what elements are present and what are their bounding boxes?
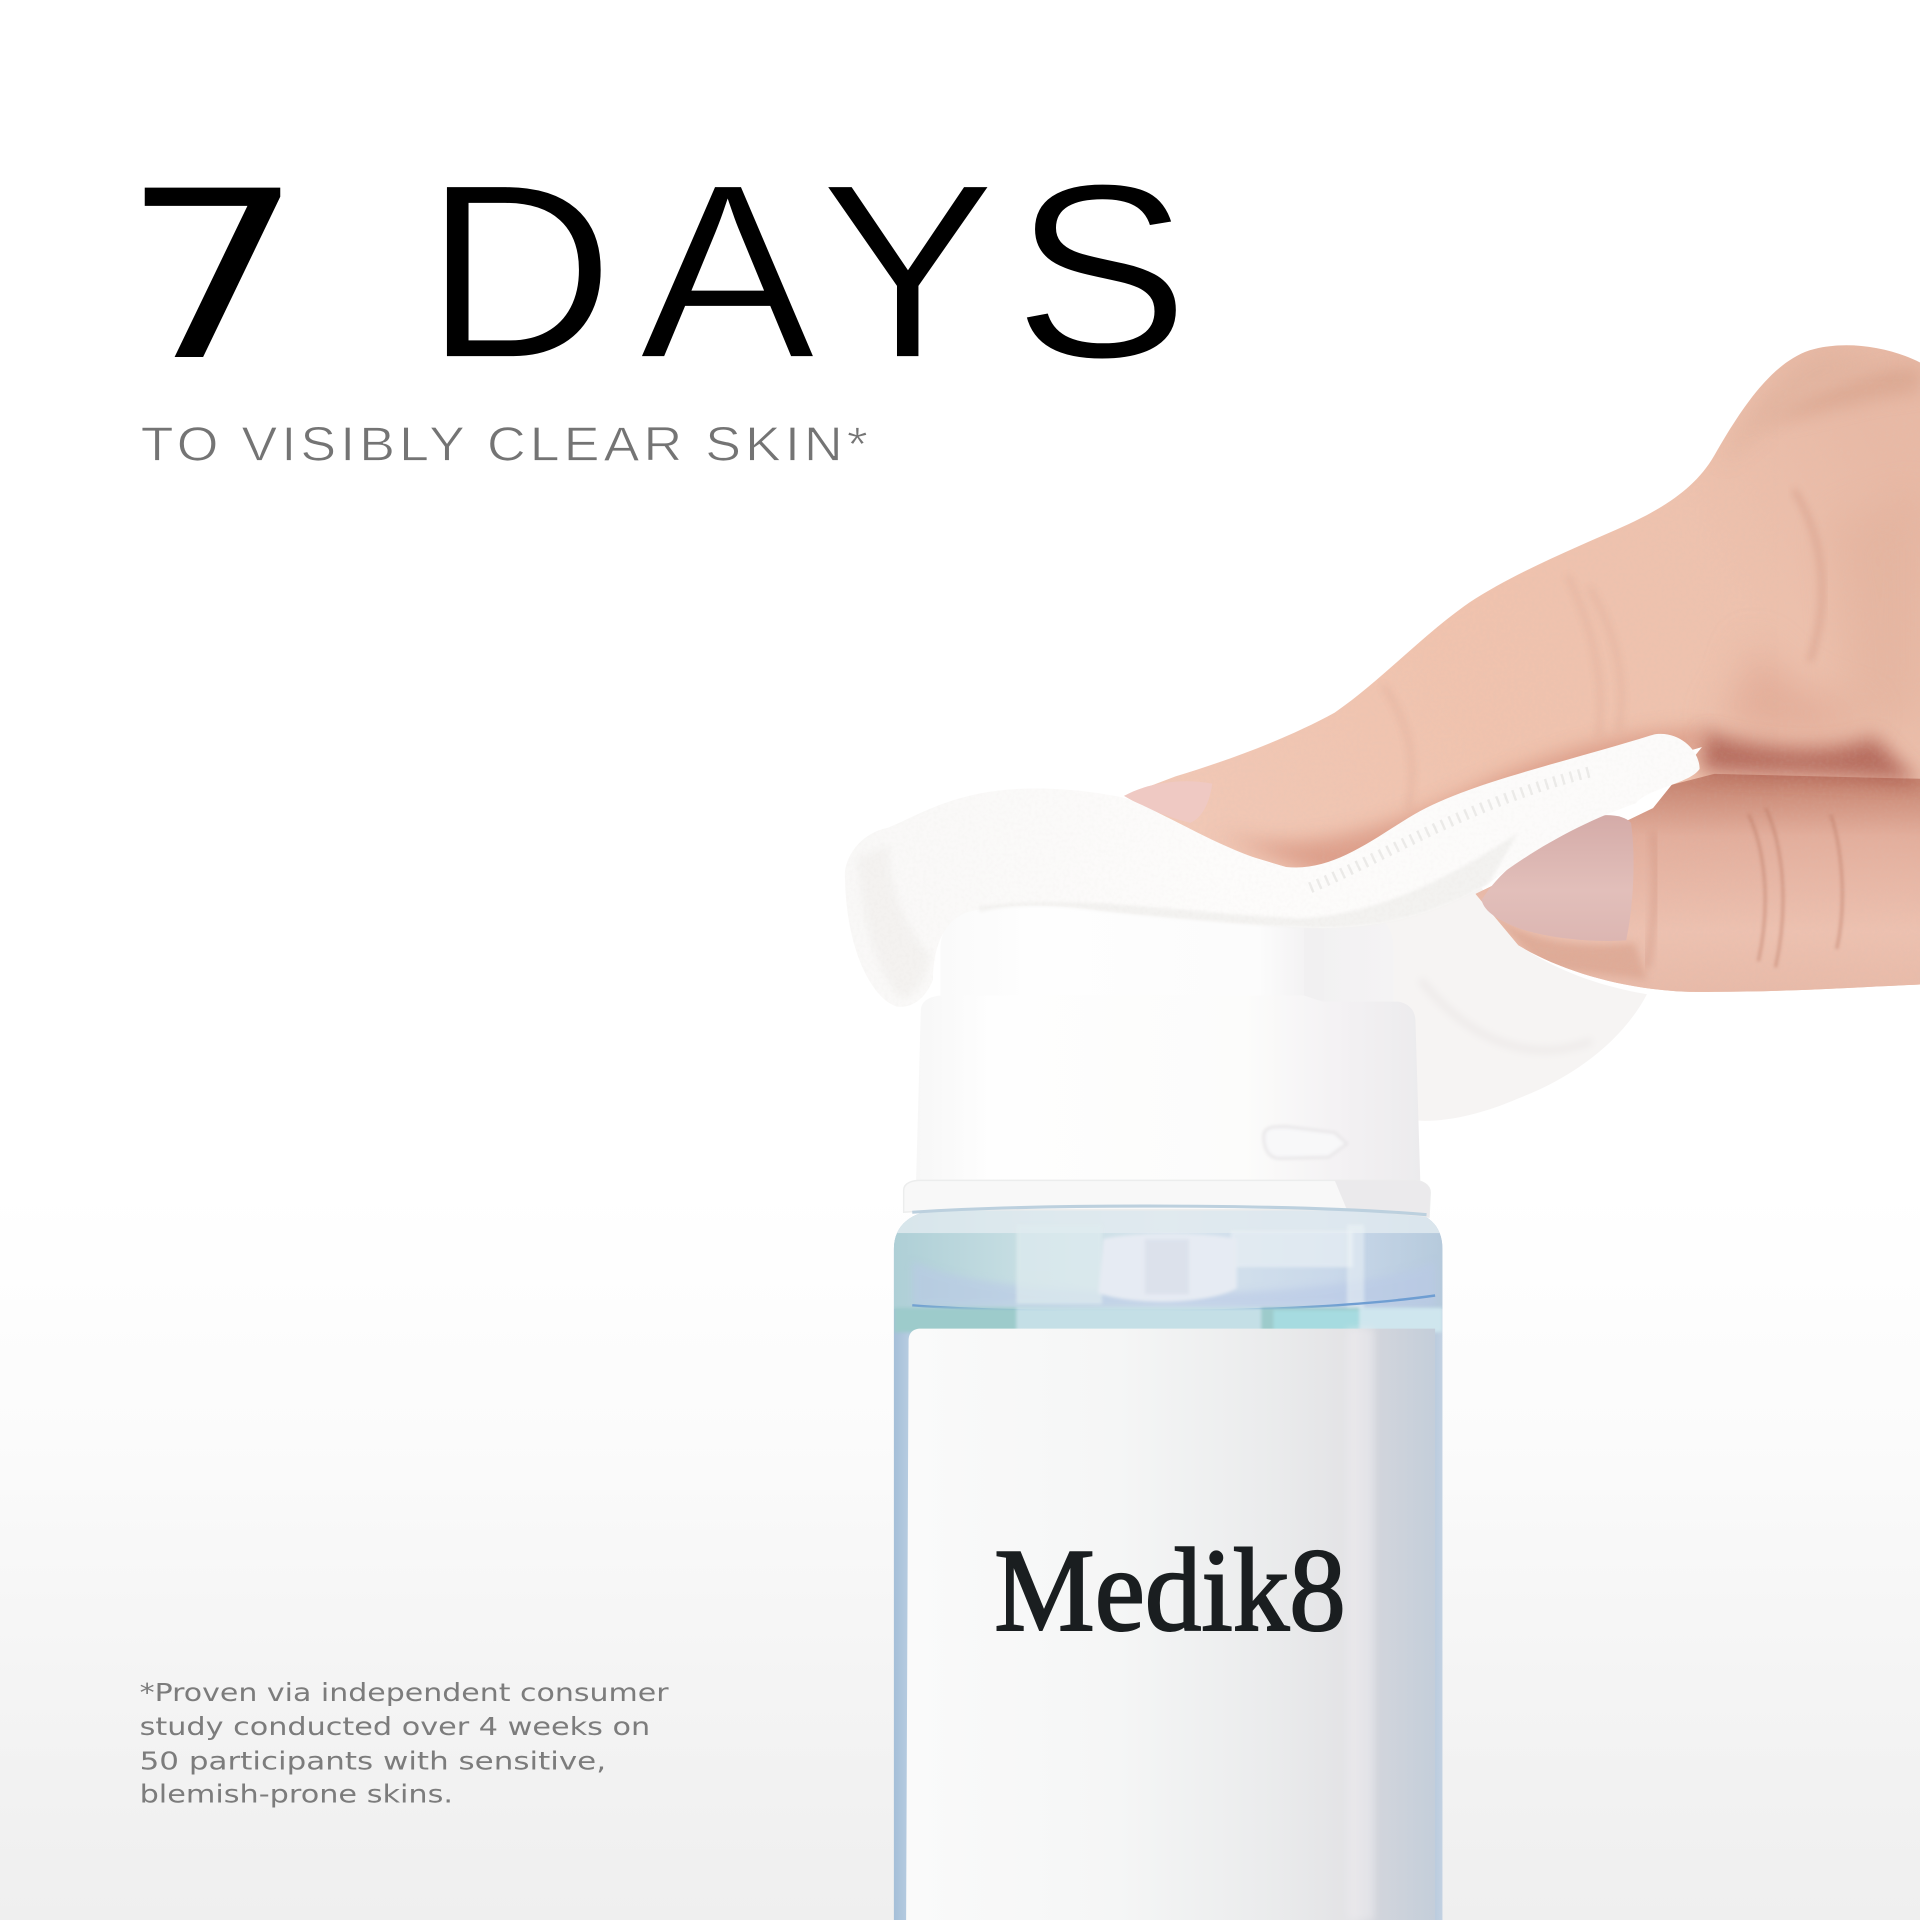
liquid line bbox=[912, 1296, 1435, 1312]
thumb bbox=[1476, 774, 1920, 992]
glass shoulder above liquid bbox=[894, 1206, 1442, 1309]
pad texture bbox=[839, 729, 1708, 1016]
cotton pad: top section bbox=[839, 729, 1708, 1016]
bottle cap bbox=[904, 904, 1430, 1217]
skin texture bbox=[1102, 343, 1920, 1004]
footnote: *Proven via independent consumer bbox=[140, 1678, 670, 1707]
footnote: 50 participants with sensitive, bbox=[140, 1746, 606, 1775]
hand bbox=[1102, 343, 1920, 1004]
heading: 7 DAYS: 7 bbox=[120, 141, 306, 413]
cap collar bbox=[916, 996, 1420, 1185]
bottle body bbox=[894, 1210, 1442, 1920]
inner insert bbox=[1098, 1234, 1237, 1302]
label bbox=[906, 1329, 1435, 1920]
subheading: TO VISIBLY CLEAR SKIN* bbox=[141, 418, 872, 471]
thumb knuckle creases bbox=[1749, 808, 1842, 967]
footnote: study conducted over 4 weeks on bbox=[140, 1712, 650, 1741]
footnote: blemish-prone skins. bbox=[140, 1779, 453, 1808]
footnote bbox=[140, 1678, 670, 1808]
cap tab bbox=[1264, 1127, 1347, 1158]
brand logo: Medik8 bbox=[994, 1524, 1346, 1656]
heading: 7 DAYS: DAYS bbox=[424, 131, 1190, 411]
cap upper plunger bbox=[940, 904, 1393, 1016]
thumbnail bbox=[1482, 815, 1634, 941]
teal band bbox=[894, 1308, 1442, 1332]
shadow between fingers bbox=[1702, 730, 1920, 784]
bottle bbox=[894, 1206, 1442, 1920]
shadow along pad edge bbox=[1212, 730, 1702, 882]
cap rim bbox=[904, 1180, 1430, 1217]
index fingernail bbox=[1124, 781, 1212, 823]
cotton pad: back section behind the cap bbox=[1384, 888, 1647, 1121]
knuckle highlight and back-of-hand shading bbox=[1791, 366, 1920, 419]
finger creases bbox=[1384, 576, 1621, 808]
